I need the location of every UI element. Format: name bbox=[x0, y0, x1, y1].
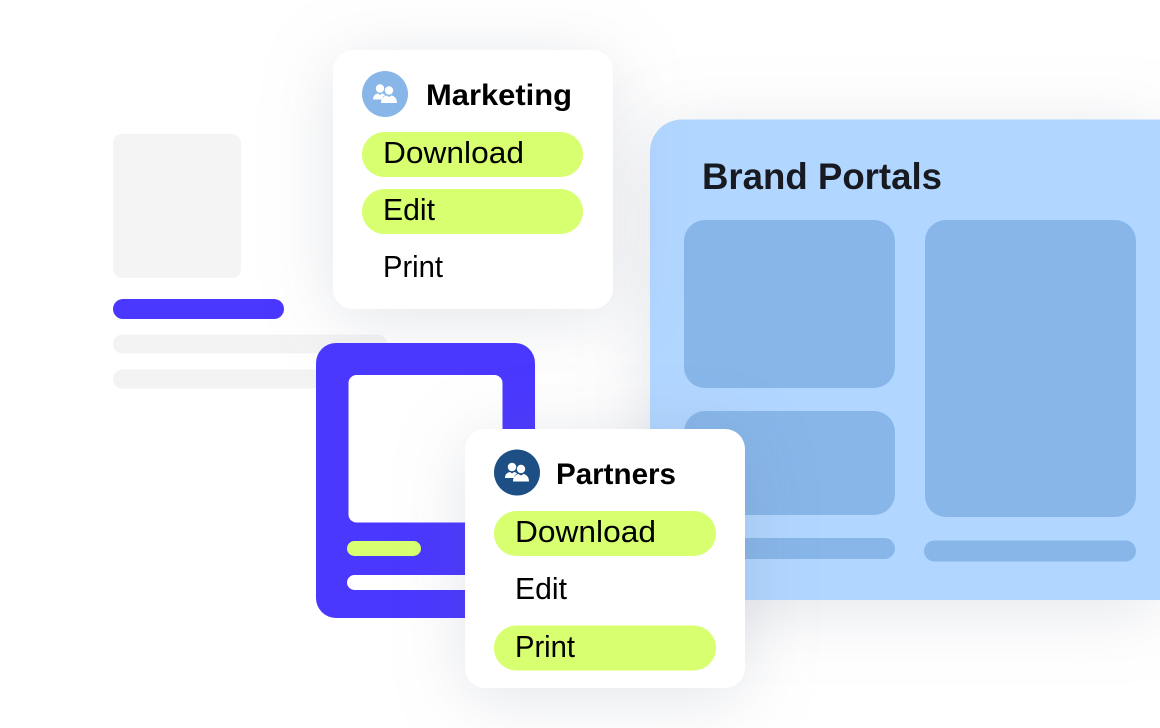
pill: download bbox=[494, 511, 716, 556]
pill: download: Download bbox=[383, 135, 524, 170]
pill: edit bbox=[362, 189, 583, 234]
placeholder tiles bbox=[684, 220, 1136, 562]
pill: download: Download bbox=[515, 514, 656, 549]
panel: partners permissions bbox=[465, 429, 745, 688]
icon: partners users bbox=[494, 450, 540, 496]
icon: marketing users bbox=[362, 71, 408, 117]
heading: marketing: Marketing bbox=[426, 79, 572, 112]
pill: download bbox=[362, 132, 583, 177]
label: print: Print bbox=[383, 249, 443, 284]
left wireframe document bbox=[113, 134, 387, 388]
heading: partners: Partners bbox=[556, 458, 676, 491]
panel: marketing permissions bbox=[333, 50, 613, 309]
pill: print bbox=[494, 626, 716, 670]
pill: edit: Edit bbox=[383, 192, 435, 227]
pill: print: Print bbox=[515, 629, 575, 664]
panel: purple asset card bbox=[316, 343, 535, 618]
heading: brand portals: Brand Portals bbox=[702, 156, 942, 197]
label: edit: Edit bbox=[515, 571, 567, 606]
panel: brand portals bbox=[650, 120, 1160, 600]
